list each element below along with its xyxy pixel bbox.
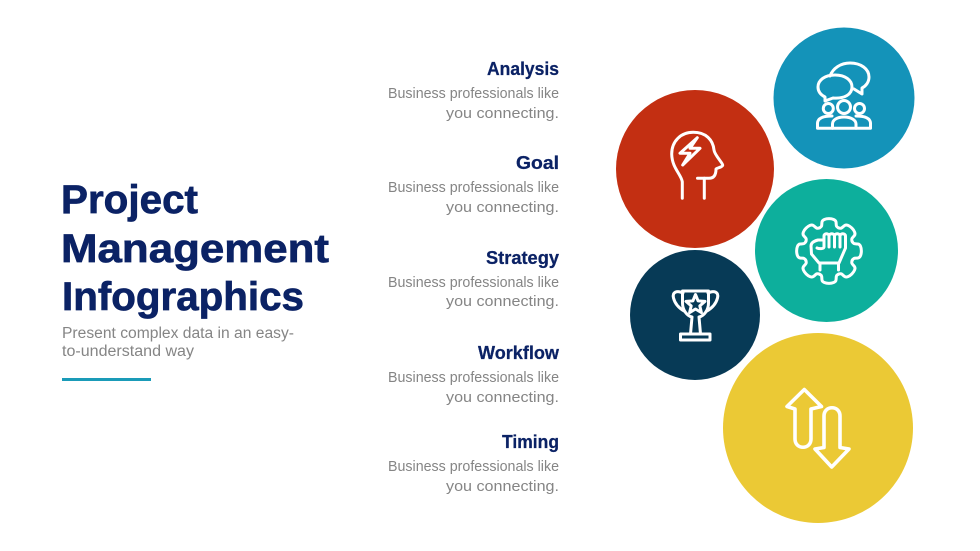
text block: Analysis: Business professionals like bbox=[388, 85, 559, 102]
circle: teal bbox=[755, 179, 898, 322]
icon: fist in gear bbox=[797, 219, 861, 283]
text block: Goal: Business professionals like bbox=[388, 179, 559, 196]
text block: Strategy bbox=[388, 248, 559, 310]
text block: Strategy: Business professionals like bbox=[388, 274, 559, 291]
text block: Timing bbox=[388, 432, 559, 495]
text block: Strategy: Strategy bbox=[486, 248, 559, 268]
text block: Timing: you connecting. bbox=[446, 478, 559, 495]
title bbox=[61, 178, 329, 319]
icon: up and down arrows bbox=[787, 390, 849, 467]
icon: trophy with star bbox=[673, 291, 718, 340]
title: Project bbox=[61, 178, 198, 222]
text block: Goal bbox=[388, 153, 559, 216]
text block: Analysis bbox=[388, 59, 559, 122]
icon: speech bubbles and people bbox=[818, 63, 870, 128]
title: Infographics bbox=[62, 275, 304, 319]
circle: blue bbox=[774, 28, 914, 168]
text block: Workflow: you connecting. bbox=[446, 389, 559, 406]
subtitle: Present complex data in an easy- bbox=[62, 325, 294, 342]
text block: Goal: you connecting. bbox=[446, 199, 559, 216]
circle: red bbox=[616, 90, 774, 248]
text block: Analysis: you connecting. bbox=[446, 105, 559, 122]
accent underline bbox=[62, 378, 151, 381]
icon: head with lightning bolt bbox=[672, 132, 723, 198]
text block: Analysis: Analysis bbox=[487, 59, 559, 79]
subtitle: to-understand way bbox=[62, 343, 194, 360]
text block: Workflow: Workflow bbox=[478, 343, 560, 363]
subtitle bbox=[62, 325, 294, 360]
text block: Workflow: Business professionals like bbox=[388, 369, 559, 386]
text block: Timing: Timing bbox=[502, 432, 559, 452]
title: Management bbox=[61, 227, 329, 271]
text block: Workflow bbox=[388, 343, 560, 406]
text block: Strategy: you connecting. bbox=[446, 293, 559, 310]
circle: yellow bbox=[723, 333, 913, 523]
circle: navy bbox=[630, 250, 760, 380]
text block: Timing: Business professionals like bbox=[388, 458, 559, 475]
text block: Goal: Goal bbox=[516, 153, 559, 173]
